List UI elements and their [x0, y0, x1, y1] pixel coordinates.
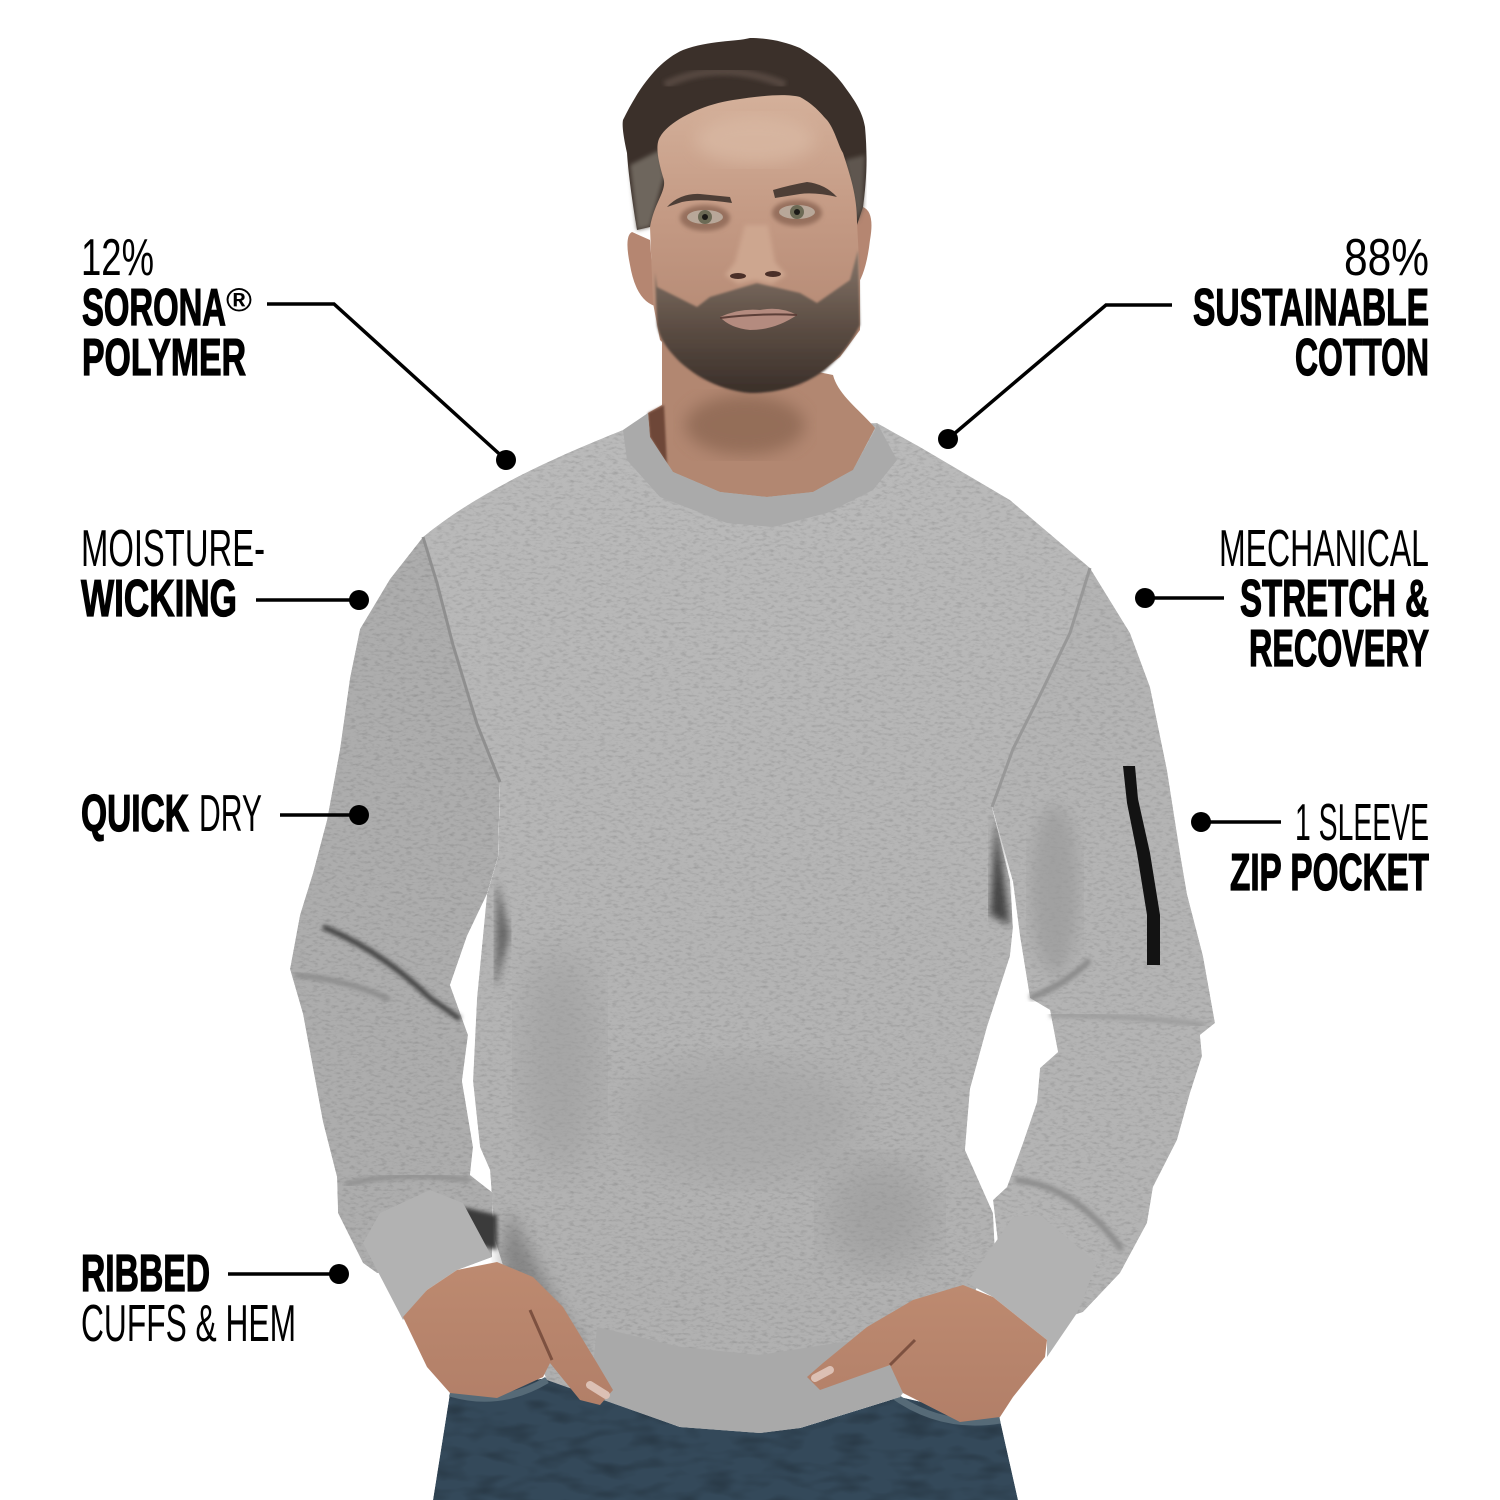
- leader line: [938, 305, 1172, 449]
- label text: [81, 229, 252, 387]
- sleeve: viewer left: [290, 537, 500, 1273]
- right ribbed cuff: [967, 1215, 1097, 1357]
- face: [650, 95, 860, 393]
- callout: 1 sleeve zip pocket: [1191, 794, 1429, 902]
- eyes and brows: [667, 182, 837, 231]
- label text: 88%: [1344, 229, 1429, 287]
- callout: ribbed cuffs and hem: [81, 1245, 349, 1353]
- jeans: [433, 1378, 1018, 1500]
- leader line: [256, 590, 369, 610]
- label text: [1219, 520, 1429, 678]
- label text: [81, 520, 265, 628]
- label text: CUFFS & HEM: [81, 1295, 296, 1353]
- beard: [655, 250, 860, 393]
- callout: mechanical stretch and recovery: [1135, 520, 1429, 678]
- sleeve: viewer right: [992, 568, 1215, 1320]
- label text: ®: [226, 281, 252, 318]
- leader line: [267, 304, 516, 470]
- label text: DRY: [199, 785, 262, 843]
- callout: 12% Sorona polymer: [81, 229, 516, 470]
- label text: MOISTURE-: [81, 520, 265, 578]
- right hand in pocket: [807, 1285, 1047, 1422]
- ears: [627, 207, 871, 306]
- ribbed crew collar: [623, 413, 897, 527]
- collar neck opening skin: [648, 340, 875, 497]
- label text: [1230, 794, 1429, 902]
- callout: quick dry: [81, 785, 369, 843]
- illustration: man wearing grey crewneck sweatshirt: [290, 38, 1215, 1500]
- torso shading: [495, 815, 1010, 1350]
- label text: [1193, 229, 1429, 387]
- hem rib band: [590, 1327, 925, 1433]
- zip pocket on sleeve: [1123, 766, 1160, 965]
- leader line: [280, 805, 369, 825]
- leader line: [1135, 588, 1224, 608]
- sweatshirt: [290, 340, 1215, 1433]
- left ribbed cuff: [363, 1190, 492, 1320]
- right sleeve folds and seam: [992, 568, 1205, 1250]
- label text: QUICK: [81, 785, 189, 843]
- leader line: [1191, 812, 1281, 832]
- label text: SORONA: [82, 279, 226, 337]
- left sleeve folds and seam: [295, 537, 500, 1185]
- callout: moisture-wicking: [81, 520, 369, 628]
- label text: POLYMER: [82, 329, 246, 387]
- label text: RIBBED: [81, 1245, 210, 1303]
- label text: 12%: [81, 229, 154, 287]
- left shadow behind cuff: [463, 1207, 497, 1250]
- label text: [81, 1245, 296, 1353]
- left hand in pocket: [403, 1262, 613, 1405]
- leader line: [228, 1264, 349, 1284]
- mouth: [720, 309, 797, 330]
- label text: WICKING: [81, 570, 237, 628]
- nose: [725, 225, 786, 284]
- callout: 88% sustainable cotton: [938, 229, 1429, 449]
- hair: [623, 38, 866, 230]
- torso and hem: [423, 423, 1090, 1433]
- head: [623, 38, 871, 393]
